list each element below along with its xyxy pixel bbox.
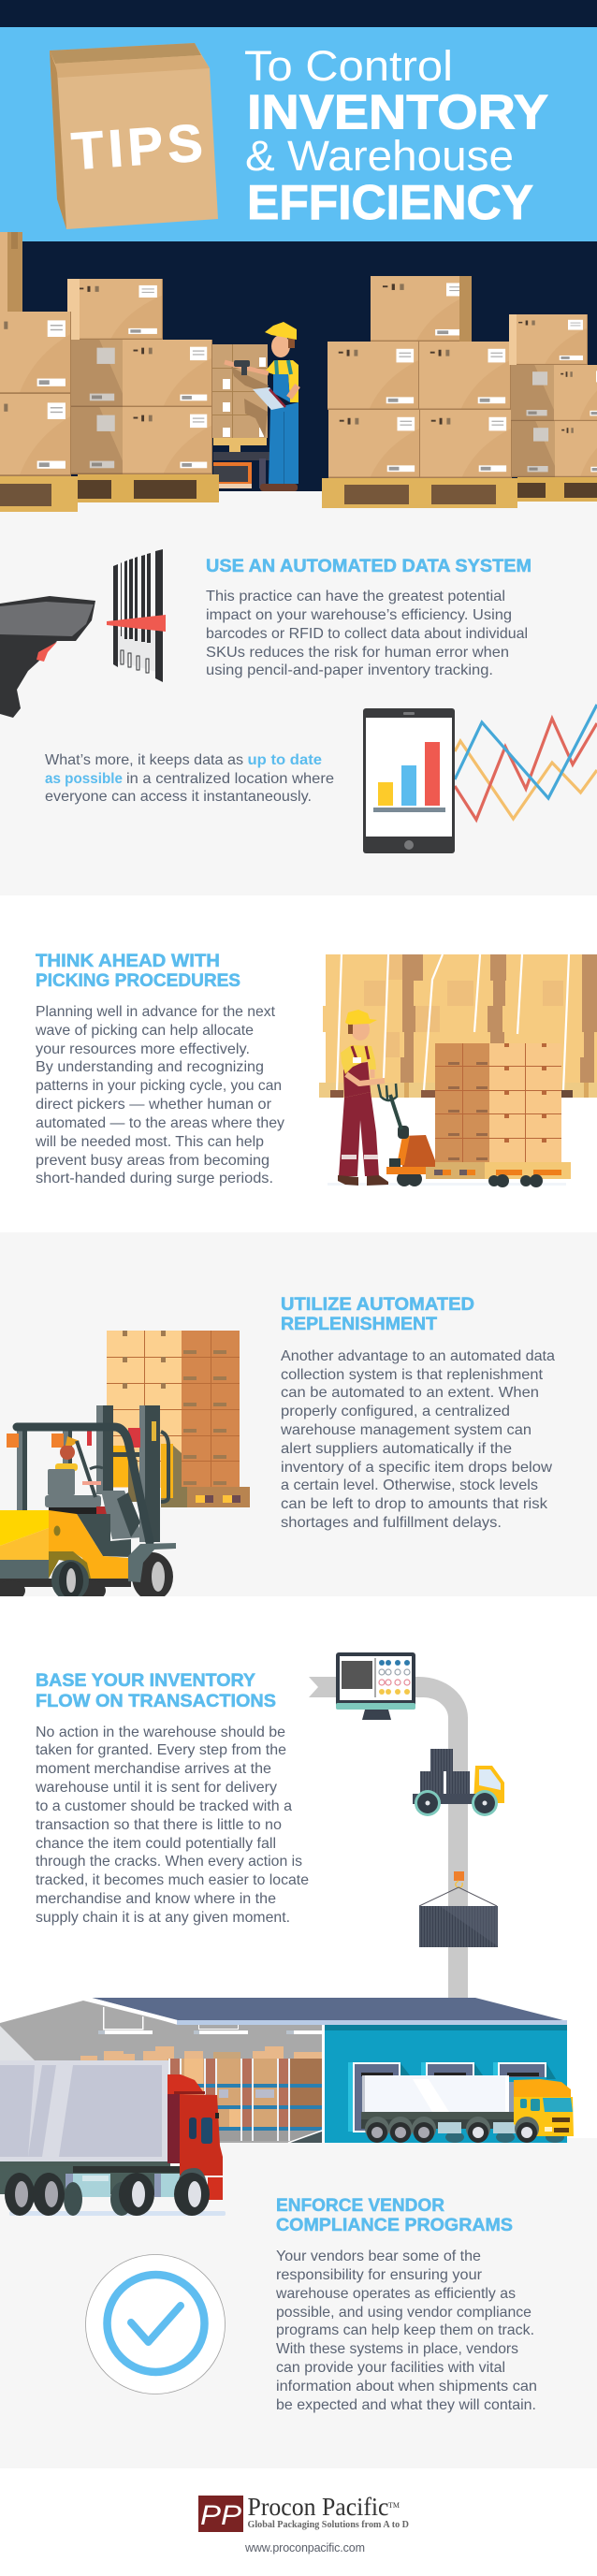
heading	[36, 951, 240, 991]
panel: vendor compliance	[86, 2195, 537, 2413]
text block: barcodes or RFID to collect data about individual	[206, 626, 528, 642]
text block: Your vendors bear some of the	[276, 2249, 481, 2264]
icon: barcode scanner	[0, 596, 95, 718]
shelves of boxes	[319, 954, 597, 1098]
panel: automated replenishment	[0, 1232, 597, 1601]
text block: tracked, it becomes much easier to locate	[36, 1872, 309, 1888]
stack behind worker	[212, 344, 269, 488]
pallet of boxes on jack	[328, 1043, 571, 1187]
footer	[0, 2468, 597, 2576]
text block: up to date: What’s more, it keeps data as	[45, 752, 243, 768]
text block: automated — to the areas where they	[36, 1115, 284, 1131]
text block: supply chain it is at any given moment.	[36, 1910, 290, 1926]
text block: SKUs reduces the risk for human error when	[206, 645, 509, 661]
icon: container on hook	[419, 1871, 498, 1947]
warehouse building	[0, 1998, 574, 2216]
text block: impact on your warehouse’s efficiency. Using	[206, 607, 512, 623]
icon: tablet with bar chart	[363, 708, 455, 853]
text block: a certain level. Otherwise, stock levels	[281, 1477, 538, 1493]
text block: possible, and using vendor compliance	[276, 2305, 531, 2321]
text block: can be automated to an extent. When	[281, 1385, 539, 1401]
loading docks	[348, 2062, 556, 2132]
forklift	[0, 1405, 182, 1601]
website: www.proconpacific.com	[244, 2541, 365, 2554]
arrow: supply chain ribbon	[309, 1677, 468, 1999]
title	[244, 42, 548, 230]
text block: information about when shipments can	[276, 2379, 537, 2394]
worker pulling jack	[338, 1010, 388, 1186]
text block: collection system is that replenishment	[281, 1367, 544, 1383]
heading: FLOW ON TRANSACTIONS	[36, 1691, 276, 1711]
section 1 background	[0, 491, 597, 895]
heading: USE AN AUTOMATED DATA SYSTEM	[206, 556, 531, 576]
text block: shortages and fulfillment delays.	[281, 1515, 502, 1531]
red semi truck	[0, 2060, 226, 2216]
text block: By understanding and recognizing	[36, 1059, 264, 1075]
text block: to a customer should be tracked with a	[36, 1798, 292, 1814]
text block: be expected and what they will contain.	[276, 2397, 536, 2413]
text block: moment merchandise arrives at the	[36, 1761, 271, 1777]
text block: will be needed most. This can help	[35, 1134, 264, 1150]
heading: COMPLIANCE PROGRAMS	[276, 2215, 513, 2235]
icon: cardboard box with TIPS	[50, 43, 218, 229]
heading: PICKING PROCEDURES	[36, 970, 240, 991]
icon: barcode with laser	[107, 549, 166, 682]
text block: short-handed during surge periods.	[36, 1171, 273, 1186]
pallet of boxes	[107, 1331, 250, 1507]
icon: cardboard box with TIPS: TIPS	[69, 112, 204, 181]
warehouse shelves	[80, 2046, 322, 2143]
text block	[275, 2249, 537, 2413]
text block	[206, 589, 528, 678]
text block: through the cracks. When every action is	[36, 1854, 302, 1870]
page background top bar	[0, 0, 597, 28]
worker with scanner	[225, 322, 298, 491]
text block: can be left to drop to amounts that risk	[281, 1496, 548, 1512]
logo	[198, 2493, 409, 2532]
logo: TM	[388, 2501, 400, 2510]
icon: delivery truck	[413, 1749, 504, 1816]
warehouse scene background	[0, 241, 597, 492]
text block: patterns in your picking cycle, you can	[36, 1078, 282, 1094]
text block: up to date: as possible	[45, 771, 123, 787]
heading	[36, 1670, 276, 1711]
logo: Global Packaging Solutions from A to D	[247, 2520, 409, 2530]
text block: properly configured, a centralized	[281, 1404, 510, 1419]
title: EFFICIENCY	[247, 176, 533, 230]
text block: Planning well in advance for the next	[36, 1004, 276, 1020]
icon: computer monitor	[336, 1652, 415, 1720]
text block: Another advantage to an automated data	[281, 1348, 555, 1364]
text block: warehouse operates as efficiently as	[275, 2286, 516, 2302]
text block: prevent busy areas from becoming	[36, 1153, 269, 1169]
text block: inventory of a specific item drops below	[281, 1460, 552, 1476]
title: To Control	[244, 42, 453, 90]
title: & Warehouse	[245, 132, 514, 180]
text block: responsibility for ensuring your	[276, 2267, 483, 2283]
text block: No action in the warehouse should be	[36, 1725, 285, 1740]
text block: direct pickers — whether human or	[36, 1097, 272, 1113]
logo: PP	[200, 2500, 241, 2531]
text block: warehouse management system can	[280, 1422, 531, 1438]
ceiling lights	[98, 2007, 322, 2034]
text block: transaction so that there is little to no	[36, 1817, 282, 1833]
text block: programs can help keep them on track.	[276, 2322, 534, 2338]
header banner	[0, 27, 597, 241]
text block	[35, 1004, 284, 1186]
panel: automated data system	[45, 556, 531, 805]
right stack of boxes on pallets	[322, 276, 597, 508]
heading	[281, 1294, 474, 1334]
text block: up to date: up to date	[247, 752, 322, 768]
panel: vendor compliance background	[0, 2138, 597, 2468]
text block	[280, 1348, 555, 1531]
text block: taken for granted. Every step from the	[36, 1742, 286, 1758]
text block: This practice can have the greatest potential	[206, 589, 505, 604]
heading	[276, 2195, 513, 2235]
text block: chance the item could potentially fall	[36, 1836, 276, 1852]
heading: ENFORCE VENDOR	[276, 2195, 444, 2216]
line chart	[455, 705, 597, 820]
text block: up to date: everyone can access it instantaneously.	[45, 789, 312, 805]
title: INVENTORY	[247, 86, 548, 140]
text block	[35, 1725, 309, 1926]
heading: REPLENISHMENT	[281, 1314, 437, 1334]
panel: picking procedures	[0, 895, 597, 1232]
text block: your resources more effectively.	[36, 1041, 250, 1057]
text block: up to date	[45, 752, 334, 805]
text block: up to date: in a centralized location where	[126, 771, 334, 787]
left stack of boxes on pallets	[0, 232, 219, 512]
heading: BASE YOUR INVENTORY	[36, 1670, 255, 1691]
text block: warehouse until it is sent for delivery	[35, 1780, 277, 1796]
icon: check mark in circle	[86, 2255, 225, 2394]
text block: can provide your facilities with vital	[276, 2360, 505, 2376]
panel: inventory flow	[0, 1596, 597, 2138]
text block: With these systems in place, vendors	[276, 2341, 518, 2357]
text block: using pencil-and-paper inventory tracking.	[206, 662, 493, 678]
heading: THINK AHEAD WITH	[36, 951, 220, 971]
text block: merchandise and know where in the	[36, 1891, 276, 1907]
text block: wave of picking can help allocate	[35, 1023, 254, 1039]
heading: UTILIZE AUTOMATED	[281, 1294, 474, 1315]
logo: Procon Pacific	[247, 2493, 389, 2521]
text block: alert suppliers automatically if the	[281, 1441, 512, 1457]
yellow semi truck	[361, 2075, 574, 2143]
